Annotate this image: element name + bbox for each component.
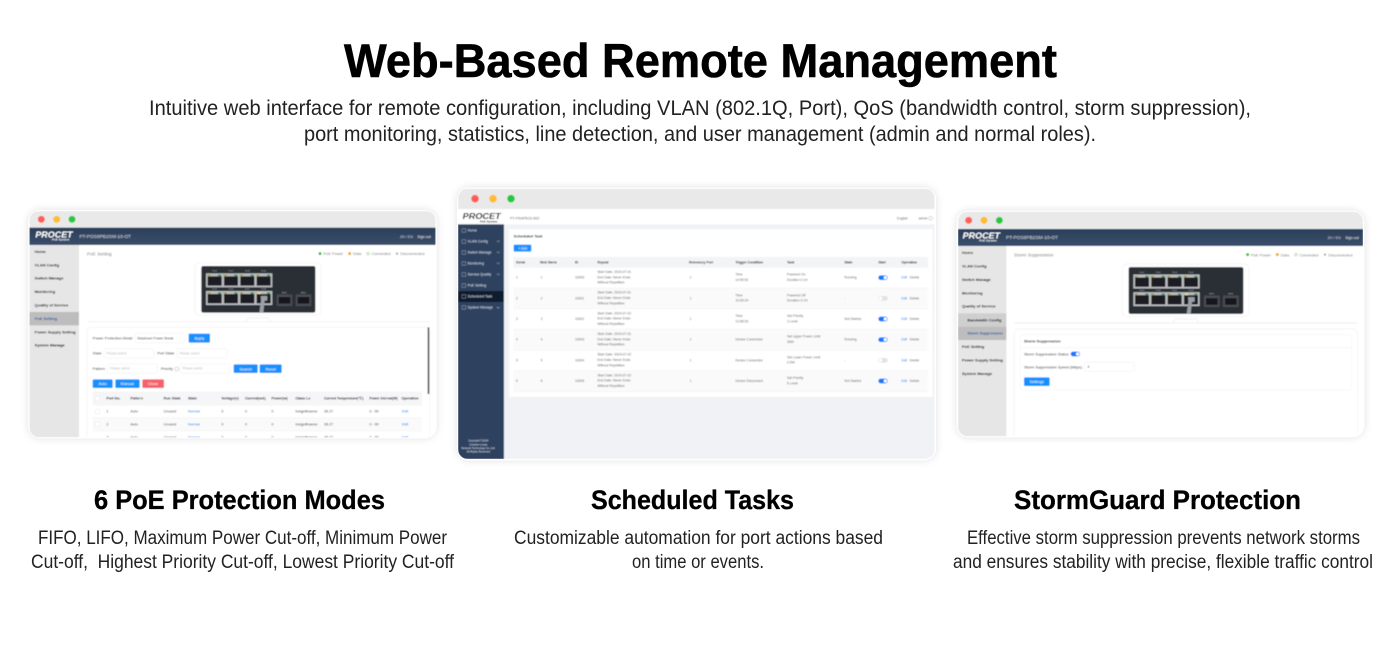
heading: scheduled tasks: Scheduled Tasks — [591, 485, 794, 515]
panel: PoE setting screenshot: Insignificance — [295, 423, 317, 427]
panel: PoE setting screenshot: 28.27 — [324, 423, 333, 427]
panel: scheduled task screenshot: Delete — [910, 317, 919, 321]
panel: scheduled task screenshot: 2 — [516, 296, 518, 300]
panel: scheduled task screenshot: PT-FI54PB15-IND — [510, 216, 540, 220]
panel: PoE setting screenshot: Port5 — [212, 288, 218, 291]
panel: PoE setting screenshot: Port8 — [261, 288, 267, 291]
panel: scheduled task screenshot: Time — [735, 314, 743, 318]
panel: scheduled task screenshot: Set Lower Power Limit — [787, 355, 820, 359]
panel: scheduled task screenshot: PROCET — [463, 212, 502, 221]
panel: storm suppression screenshot: Storm Suppression Status — [1024, 352, 1069, 356]
panel: scheduled task screenshot: Set Upper Power Limit — [787, 335, 820, 339]
panel: PoE setting screenshot: PoE System — [52, 238, 70, 242]
panel: storm suppression screenshot: System Manage — [962, 371, 993, 376]
panel: storm suppression screenshot: Port8 — [1189, 289, 1194, 292]
panel: scheduled task screenshot: 10001 — [575, 296, 584, 300]
panel: PoE setting screenshot: 28.27 — [324, 435, 333, 439]
text: scheduled tasks description: on time or events. — [632, 552, 764, 573]
panel: storm suppression screenshot: Port1 — [1140, 271, 1144, 274]
panel: storm suppression screenshot: Data — [1281, 252, 1290, 257]
panel: PoE setting screenshot: SFP2 — [301, 292, 306, 294]
panel: scheduled task screenshot: Edit — [901, 276, 907, 280]
column: PoE protection modes — [31, 485, 455, 573]
panel: scheduled task screenshot: Repeat — [597, 260, 609, 264]
panel: storm suppression screenshot: Switch Manage — [962, 277, 992, 282]
panel: scheduled task screenshot: Relevancy Port — [689, 260, 714, 264]
panel: scheduled task screenshot: 4 — [541, 338, 543, 342]
panel: PoE setting screenshot: Sign out — [417, 235, 431, 239]
panel: storm suppression screenshot: Port5 — [1140, 289, 1145, 292]
panel: PoE setting screenshot: Voltage(v) — [221, 396, 240, 400]
panel: scheduled task screenshot: Copyright ©2024 — [468, 439, 489, 443]
text: scheduled tasks description — [514, 528, 883, 573]
panel: PoE setting screenshot: Priority — [161, 367, 173, 371]
panel: scheduled task screenshot: 1 — [690, 338, 692, 342]
panel: PoE setting screenshot: Disconnected — [400, 251, 424, 256]
panel: storm suppression screenshot: Sign out — [1345, 236, 1359, 240]
panel: scheduled task screenshot: Set Priority — [787, 376, 804, 380]
panel: scheduled task screenshot: 5 Level — [787, 381, 798, 385]
panel: scheduled task screenshot: Edit — [901, 379, 907, 383]
panel: storm suppression screenshot: Storm Suppression — [967, 331, 1004, 336]
panel: scheduled task screenshot: Start Date: 2024-07-01 — [597, 332, 631, 336]
panel: PoE setting screenshot: 0 — [271, 435, 273, 439]
panel: PoE setting screenshot: Port3 — [245, 270, 251, 273]
panel: PoE setting screenshot: Home — [35, 249, 47, 254]
panel: PoE setting screenshot: Monitoring — [35, 289, 56, 294]
panel: PoE setting screenshot: Auto — [99, 381, 108, 386]
panel: PoE setting screenshot: Port4 — [261, 270, 267, 273]
panel: storm suppression screenshot — [957, 211, 1364, 442]
panel: scheduled task screenshot: Without Repetition — [597, 322, 625, 326]
panel: scheduled task screenshot: Start — [878, 260, 887, 264]
panel: PoE setting screenshot: Insignificance — [295, 410, 317, 414]
panel: scheduled task screenshot: Creative Loops — [469, 442, 488, 446]
panel: scheduled task screenshot: Running — [844, 276, 857, 280]
panel: scheduled task screenshot: Device Disconnect — [735, 379, 763, 383]
panel: PoE setting screenshot: Normal — [188, 435, 200, 439]
panel: PoE setting screenshot: Manual — [121, 381, 134, 386]
panel: storm suppression screenshot: PT-POS8PB2SM-10-OT — [1006, 235, 1058, 240]
panel: scheduled task screenshot: PoE System — [480, 220, 498, 224]
panel: scheduled task screenshot: 0.5W — [787, 361, 796, 365]
panel: PoE setting screenshot: Power(w) — [271, 396, 288, 400]
panel: storm suppression screenshot: 4 — [1087, 365, 1089, 369]
panel: scheduled task screenshot: Edit — [901, 338, 907, 342]
panel: PoE setting screenshot: Maximum Power Break — [137, 336, 174, 340]
panel: storm suppression screenshot: SFP1 — [1209, 293, 1214, 295]
panel: PoE setting screenshot: 0 - 90 — [369, 410, 379, 414]
panel: scheduled task screenshot: Scheduled Task — [514, 235, 543, 239]
panel: scheduled task screenshot: Without Repetition — [597, 301, 625, 305]
panel: scheduled task screenshot: End Date: Never Ends — [597, 275, 631, 279]
panel: scheduled task screenshot: 1 — [690, 276, 692, 280]
panel: scheduled task screenshot: Delete — [910, 296, 919, 300]
text: PoE modes description: Cut-off, Highest Priority Cut-off, Lowest Priority Cut-off — [31, 552, 455, 573]
panel: scheduled task screenshot: Device Connected — [735, 338, 763, 342]
panel: scheduled task screenshot: 5 — [541, 358, 543, 362]
panel: storm suppression screenshot: PoE Setting — [962, 344, 985, 349]
panel: scheduled task screenshot: 3 Level — [787, 319, 798, 323]
panel: PoE setting screenshot: Edit — [402, 410, 408, 414]
panel: scheduled task screenshot: 14:55:52 — [735, 278, 748, 282]
panel: scheduled task screenshot: Nick Name — [540, 260, 557, 264]
text: stormguard description: Effective storm suppression prevents network storms — [967, 528, 1360, 549]
panel: PoE setting screenshot: Normal — [188, 410, 200, 414]
panel: PoE setting screenshot: 0 — [245, 423, 247, 427]
panel: storm suppression screenshot: Storm Suppression — [1024, 338, 1061, 343]
panel: PoE setting screenshot: Reset — [265, 366, 277, 371]
panel: PoE setting screenshot: 0 - 90 — [369, 423, 379, 427]
panel: PoE setting screenshot: Run State — [164, 396, 181, 400]
panel: scheduled task screenshot: Start Date: 2024-07-02 — [597, 311, 631, 315]
panel: scheduled task screenshot: Edit — [901, 296, 907, 300]
panel: PoE setting screenshot: PoE Setting — [87, 251, 112, 256]
panel: scheduled task screenshot: Network Technology Co.,Ltd. — [461, 446, 496, 450]
subtitle text: port monitoring, statistics, line detection, and user management (admin and normal roles). — [304, 123, 1096, 146]
panel: scheduled task screenshot: System Manage — [468, 306, 493, 310]
panel: scheduled task screenshot: Edit — [901, 317, 907, 321]
panel: scheduled task screenshot: Scheduled Task — [468, 295, 492, 299]
panel: scheduled task screenshot: Switch Manage — [468, 250, 492, 254]
panel: scheduled task screenshot: admin — [919, 216, 928, 220]
panel: scheduled task screenshot: Time — [735, 273, 743, 277]
column: stormguard protection — [953, 485, 1373, 573]
panel: PoE setting screenshot: Switch Manage — [35, 276, 64, 281]
panel: PoE setting screenshot: Pattern — [93, 367, 105, 371]
panel: scheduled task screenshot — [457, 188, 936, 460]
panel: scheduled task screenshot: Without Repetition — [597, 343, 625, 347]
panel: scheduled task screenshot: Delete — [910, 276, 919, 280]
panel: scheduled task screenshot: Trigger Condition — [735, 260, 763, 264]
panel: scheduled task screenshot: 10003 — [575, 338, 584, 342]
panel: scheduled task screenshot: 1 — [690, 317, 692, 321]
panel: PoE setting screenshot: Please select — [107, 351, 127, 355]
panel: storm suppression screenshot: Connected — [1299, 252, 1319, 257]
panel: PoE setting screenshot: 3 — [106, 435, 108, 439]
panel: PoE setting screenshot: Class Le — [295, 396, 310, 400]
panel: PoE setting screenshot: Port1 — [212, 270, 217, 273]
panel: scheduled task screenshot: End Date: Never Ends — [597, 317, 631, 321]
title: Web-Based Remote Management — [344, 34, 1057, 87]
panel: scheduled task screenshot: 2 — [541, 296, 543, 300]
panel: scheduled task screenshot: 30W — [787, 340, 795, 344]
panel: scheduled task screenshot: End Date: Never Ends — [597, 296, 631, 300]
panel: storm suppression screenshot: PoE Power — [1251, 252, 1272, 257]
panel: PoE setting screenshot: State — [93, 352, 102, 356]
panel: scheduled task screenshot: Running — [844, 338, 857, 342]
panel: storm suppression screenshot: Port3 — [1172, 271, 1178, 274]
panel: scheduled task screenshot: 6 — [516, 379, 518, 383]
panel: scheduled task screenshot: 10000 — [575, 276, 584, 280]
panel: PoE setting screenshot: 0 — [221, 435, 223, 439]
panel: PoE setting screenshot: Operation — [401, 396, 419, 400]
panel: storm suppression screenshot: PROCET — [963, 230, 1001, 240]
panel: scheduled task screenshot: English — [897, 216, 908, 220]
panel: PoE setting screenshot: 0 — [221, 410, 223, 414]
panel: PoE setting screenshot: Normal — [188, 423, 200, 427]
panel: scheduled task screenshot: Home — [468, 228, 477, 232]
panel: PoE setting screenshot: 0 - 90 — [369, 435, 379, 439]
panel: scheduled task screenshot: 10002 — [575, 317, 584, 321]
panel: scheduled task screenshot: 1 — [541, 276, 543, 280]
panel: scheduled task screenshot: Not Started — [844, 317, 861, 321]
panel: scheduled task screenshot: 1 — [690, 379, 692, 383]
panel: scheduled task screenshot: End Date: Never Ends — [597, 379, 631, 383]
panel: PoE setting screenshot: 1 — [106, 410, 108, 414]
panel: scheduled task screenshot: 3 — [516, 317, 518, 321]
panel: scheduled task screenshot: End Date: Never Ends — [597, 358, 631, 362]
panel: PoE setting screenshot: Auto — [130, 410, 138, 414]
panel: storm suppression screenshot: Storm Suppression — [1014, 252, 1054, 257]
panel: PoE setting screenshot: Insignificance — [295, 435, 317, 439]
panel: scheduled task screenshot: PoE Setting — [468, 284, 486, 288]
heading: stormguard: StormGuard Protection — [1014, 485, 1301, 515]
panel: scheduled task screenshot: Without Repetition — [597, 384, 625, 388]
panel: PoE setting screenshot: State — [188, 396, 197, 400]
panel: scheduled task screenshot: Delete — [910, 338, 919, 342]
panel: PoE setting screenshot: Port State — [157, 352, 174, 356]
panel: storm suppression screenshot: Monitoring — [962, 290, 983, 295]
panel: scheduled task screenshot: Start Date: 2024-07-01 — [597, 270, 631, 274]
panel: PoE setting screenshot: 2 — [106, 423, 108, 427]
panel: scheduled task screenshot: 10:09:24 — [735, 299, 748, 303]
panel: scheduled task screenshot: 1 — [516, 276, 518, 280]
panel: PoE setting screenshot — [28, 210, 437, 441]
panel: PoE setting screenshot: PoE Power — [323, 251, 344, 256]
panel: scheduled task screenshot: Device Connected — [735, 358, 763, 362]
panel: PoE setting screenshot: 0 — [245, 410, 247, 414]
subtitle text: Intuitive web interface for remote configuration, including VLAN (802.1Q, Port), QoS (bandwidth control, storm suppression), — [149, 97, 1251, 120]
panel: storm suppression screenshot: Settings — [1029, 379, 1044, 384]
panel: storm suppression screenshot: Port6 — [1156, 289, 1162, 292]
panel: scheduled task screenshot: ID — [575, 260, 579, 264]
panel: scheduled task screenshot: Start Date: 2024-07-02 — [597, 353, 631, 357]
panel: scheduled task screenshot: Without Repetition — [597, 281, 625, 285]
subtitle text — [149, 97, 1251, 146]
panel: scheduled task screenshot: - — [844, 296, 845, 300]
panel: scheduled task screenshot: 1 — [690, 296, 692, 300]
panel: storm suppression screenshot: Port7 — [1172, 289, 1177, 292]
panel: scheduled task screenshot: Service Quality — [468, 273, 491, 277]
text: PoE modes description: FIFO, LIFO, Maximum Power Cut-off, Minimum Power — [38, 528, 448, 549]
panel: scheduled task screenshot: + Add — [518, 246, 527, 250]
panel: scheduled task screenshot: Powered On — [787, 273, 806, 277]
panel: PoE setting screenshot: Please select — [180, 351, 200, 355]
panel: PoE setting screenshot: Connected — [371, 251, 391, 256]
panel: PoE setting screenshot: PoE Setting — [35, 316, 58, 321]
panel: storm suppression screenshot: SFP2 — [1228, 293, 1233, 295]
panel: PoE setting screenshot: Pattern — [130, 396, 143, 400]
panel: scheduled task screenshot: Task — [787, 260, 794, 264]
panel: scheduled task screenshot: Operation — [901, 260, 917, 264]
panel: scheduled task screenshot: Serial — [516, 260, 525, 264]
panel: PoE setting screenshot: Current Temperature(℃) — [324, 396, 364, 400]
panel: PoE setting screenshot: 0 — [221, 423, 223, 427]
panel: PoE setting screenshot: Port6 — [229, 288, 234, 291]
panel: PoE setting screenshot: SFP1 — [282, 292, 287, 294]
panel: scheduled task screenshot: 3 — [541, 317, 543, 321]
panel: scheduled task screenshot: Edit — [901, 358, 907, 362]
panel: storm suppression screenshot: VLAN Config — [962, 263, 987, 268]
panel: PoE setting screenshot: 28.27 — [324, 410, 333, 414]
panel: scheduled task screenshot: Start Date: 2024-07-01 — [597, 291, 631, 295]
panel: PoE setting screenshot: Quality of Service — [35, 302, 69, 307]
panel: scheduled task screenshot: Monitoring — [468, 261, 484, 265]
panel: PoE setting screenshot: Please select — [110, 367, 130, 371]
panel: scheduled task screenshot: 10004 — [575, 358, 584, 362]
text: stormguard description — [953, 528, 1373, 573]
panel: PoE setting screenshot: Search — [239, 366, 252, 371]
panel: PoE setting screenshot: Auto — [130, 423, 138, 427]
panel: PoE setting screenshot: Power Protection Mode — [93, 336, 133, 340]
panel: PoE setting screenshot: 0 — [245, 435, 247, 439]
column: scheduled tasks — [514, 485, 883, 573]
panel: PoE setting screenshot: Auto — [130, 435, 138, 439]
panel: PoE setting screenshot: Apply — [194, 336, 204, 341]
panel: scheduled task screenshot: End Date: Never Ends — [597, 337, 631, 341]
panel: scheduled task screenshot: Time — [735, 293, 743, 297]
panel: scheduled task screenshot: 4 — [516, 338, 518, 342]
panel: PoE setting screenshot: Please select — [183, 367, 203, 371]
panel: PoE setting screenshot: System Manage — [35, 343, 66, 348]
panel: PoE setting screenshot: Data — [353, 251, 362, 256]
panel: scheduled task screenshot: All Rights Reserved — [467, 450, 491, 454]
panel: scheduled task screenshot: Delete — [910, 358, 919, 362]
heading: PoE modes: 6 PoE Protection Modes — [94, 485, 385, 515]
panel: scheduled task screenshot: Set Priority — [787, 314, 804, 318]
text: PoE modes description — [31, 528, 455, 573]
panel: scheduled task screenshot: Duration 0.1H — [787, 299, 808, 303]
text: scheduled tasks description: Customizable automation for port actions based — [514, 528, 883, 549]
panel: scheduled task screenshot: 5 — [516, 358, 518, 362]
panel: scheduled task screenshot: Without Repetition — [597, 363, 625, 367]
panel: scheduled task screenshot: Start Date: 2024-07-02 — [597, 373, 631, 377]
panel: scheduled task screenshot: 6 — [541, 379, 543, 383]
panel: scheduled task screenshot: 13:58:53 — [735, 319, 748, 323]
panel: storm suppression screenshot: ZH / EN — [1328, 236, 1341, 240]
panel: PoE setting screenshot: Port No. — [106, 396, 121, 400]
panel: PoE setting screenshot: PT-POS8PB2SM-10-OT — [79, 234, 131, 239]
panel: PoE setting screenshot: Unused — [164, 435, 176, 439]
panel: scheduled task screenshot: Duration 0.1H — [787, 278, 808, 282]
panel: PoE setting screenshot: 0 — [271, 410, 273, 414]
panel: PoE setting screenshot: Unused — [164, 410, 176, 414]
panel: PoE setting screenshot: Current(mA) — [245, 396, 266, 400]
panel: PoE setting screenshot: Close — [148, 381, 159, 386]
panel: scheduled task screenshot: Powered Off — [787, 293, 806, 297]
panel: scheduled task screenshot: VLAN Config — [468, 239, 488, 243]
panel: scheduled task screenshot: 1 — [690, 358, 692, 362]
panel: PoE setting screenshot: Unused — [164, 423, 176, 427]
panel: PoE setting screenshot: Edit — [402, 423, 408, 427]
panel: PoE setting screenshot: Power Supply Setting — [35, 329, 76, 334]
panel: scheduled task screenshot: 10005 — [575, 379, 584, 383]
panel: PoE setting screenshot: Port7 — [245, 288, 250, 291]
panel: scheduled task screenshot: State — [844, 260, 853, 264]
panel: PoE setting screenshot: Edit — [402, 435, 408, 439]
panel: storm suppression screenshot: Disconnected — [1328, 252, 1352, 257]
panel: PoE setting screenshot: ZH / EN — [400, 235, 413, 239]
panel: scheduled task screenshot: - — [844, 358, 845, 362]
panel: storm suppression screenshot: PoE System — [979, 239, 997, 243]
panel: PoE setting screenshot: 0 — [271, 423, 273, 427]
panel: storm suppression screenshot: Port2 — [1156, 271, 1161, 274]
panel: storm suppression screenshot: Port4 — [1189, 271, 1194, 274]
panel: scheduled task screenshot: Delete — [910, 379, 919, 383]
panel: PoE setting screenshot: Port2 — [229, 270, 233, 273]
panel: PoE setting screenshot: Power Interval(W) — [369, 396, 398, 400]
panel: storm suppression screenshot: Bandwidth Config — [967, 317, 1002, 322]
panel: PoE setting screenshot: PROCET — [35, 229, 73, 239]
panel: storm suppression screenshot: Power Supply Setting — [962, 358, 1004, 363]
panel: scheduled task screenshot: Not Started — [844, 379, 861, 383]
panel: PoE setting screenshot: VLAN Config — [35, 262, 60, 267]
panel: storm suppression screenshot: Quality of Service — [962, 304, 996, 309]
panel: storm suppression screenshot: Home — [962, 250, 974, 255]
panel: storm suppression screenshot: Storm Suppression Speed (Mbps) — [1024, 365, 1083, 369]
